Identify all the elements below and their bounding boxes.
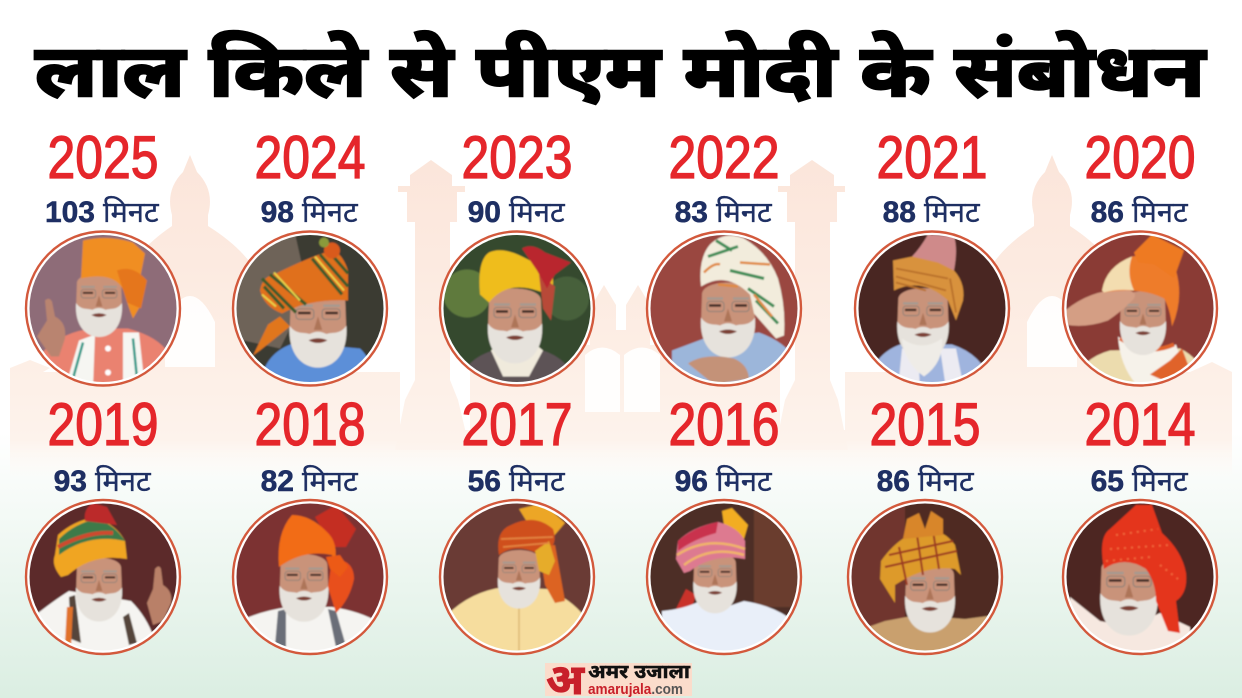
entry 2018: 82: [261, 465, 294, 498]
entry 2020: मिनट: [1132, 196, 1189, 229]
entry 2017: 56: [468, 465, 501, 498]
entry 2014: 65: [1091, 465, 1124, 498]
fort: left tower: [395, 160, 470, 450]
entry 2020: 86: [1091, 196, 1124, 229]
entry 2021: 2021: [876, 124, 988, 191]
entry 2020: [1060, 124, 1220, 388]
entry 2014: मिनट: [1132, 465, 1189, 498]
portrait 2015: [852, 504, 998, 650]
entry 2014: [1060, 391, 1220, 657]
portrait 2023: [444, 235, 590, 382]
fort: central chhatris: [592, 285, 650, 335]
entry 2016: मिनट: [716, 465, 773, 498]
portrait 2024: [236, 235, 384, 382]
entry 2017: 2017: [462, 391, 572, 458]
entry 2015: मिनट: [918, 465, 975, 498]
portrait 2021: [858, 235, 1006, 382]
entry 2023: मिनट: [509, 196, 566, 229]
entry 2024: 98: [261, 196, 294, 229]
entry 2018: 2018: [254, 391, 366, 458]
portrait 2018: [236, 504, 384, 650]
entry 2022: मिनट: [716, 196, 773, 229]
entry 2016: 96: [675, 465, 708, 498]
entry 2023: 90: [468, 196, 501, 229]
entry 2019: [23, 391, 183, 657]
portrait 2025: [30, 235, 176, 382]
fort: main wall: [10, 330, 1232, 480]
entry 2017: मिनट: [509, 465, 566, 498]
entry 2016: 2016: [668, 391, 780, 458]
entry 2016: [644, 391, 804, 657]
fort: right tower: [775, 160, 848, 450]
entry 2019: 2019: [48, 391, 158, 458]
logo name: अमर उजाला: [588, 662, 690, 683]
entry 2025: 103: [45, 196, 95, 229]
entry 2017: [437, 391, 597, 657]
fort: right dome: [980, 155, 1125, 372]
portrait 2019: [30, 504, 176, 650]
entry 2021: मिनट: [924, 196, 981, 229]
fort: left dome: [120, 155, 265, 372]
entry 2019: 93: [54, 465, 87, 498]
entry 2018: मिनट: [302, 465, 359, 498]
entry 2015: 2015: [870, 391, 980, 458]
entry 2021: [852, 124, 1012, 388]
entry 2025: [23, 124, 183, 388]
entry 2025: 2025: [48, 124, 158, 191]
logo: Amar Ujala: [545, 656, 692, 698]
background: Red Fort silhouette: [10, 155, 1232, 480]
entry 2022: 2022: [668, 124, 780, 191]
entry 2025: मिनट: [103, 196, 160, 229]
entry 2014: 2014: [1084, 391, 1196, 458]
entry 2015: 86: [877, 465, 910, 498]
entry 2020: 2020: [1084, 124, 1196, 191]
entry 2023: [437, 124, 597, 388]
entry 2015: [845, 391, 1005, 657]
title: लाल किले से पीएम मोदी के संबोधन: [35, 31, 1207, 112]
entry 2019: मिनट: [95, 465, 152, 498]
entry 2024: 2024: [254, 124, 366, 191]
portrait 2016: [650, 504, 798, 650]
portrait 2017: [444, 504, 590, 650]
logo url: amarujala.com: [588, 681, 683, 698]
entry 2018: [230, 391, 390, 657]
portrait 2020: [1066, 235, 1214, 382]
background: fort arch openings: [165, 296, 1077, 412]
portrait 2022: [650, 235, 798, 382]
entry 2021: 88: [883, 196, 916, 229]
entry 2022: [644, 124, 804, 388]
entry 2024: मिनट: [302, 196, 359, 229]
entry 2024: [230, 124, 390, 388]
entry 2022: 83: [675, 196, 708, 229]
entry 2023: 2023: [462, 124, 572, 191]
portrait 2014: [1066, 504, 1214, 650]
